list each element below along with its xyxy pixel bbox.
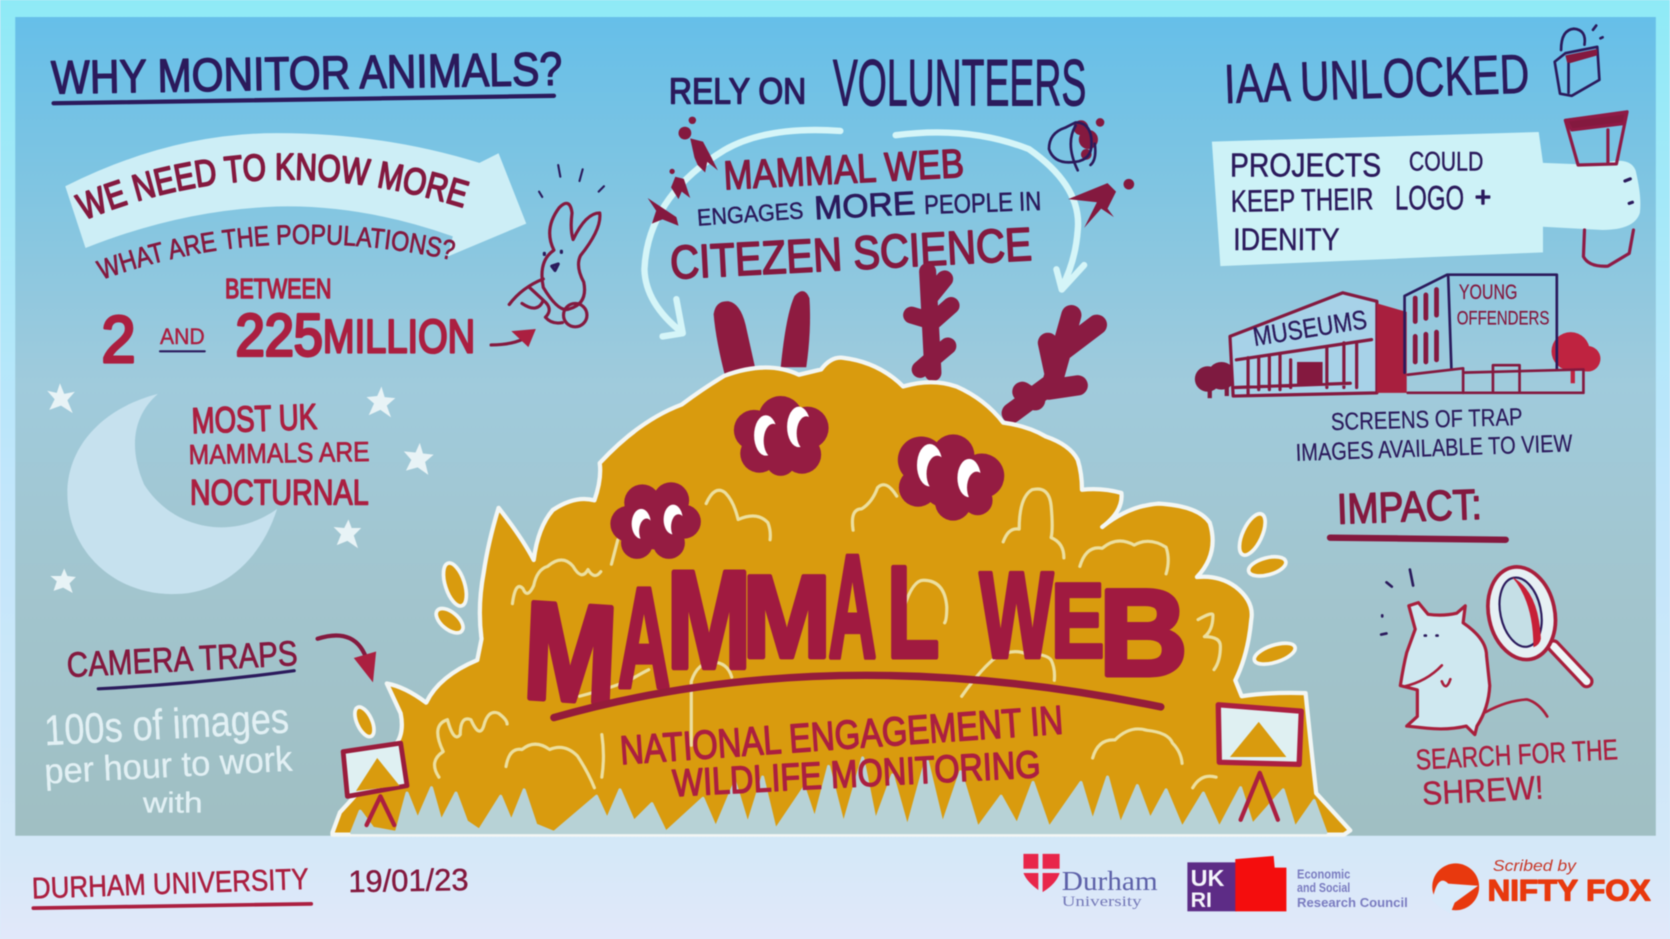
arrows: volunteer cycle — [644, 130, 1084, 336]
text: search for the shrew — [1415, 734, 1619, 812]
text: population range: AND — [160, 324, 205, 349]
title: mammal web: E — [1051, 561, 1104, 679]
squiggly plants — [435, 485, 1220, 788]
text: population range: 225 — [236, 302, 323, 369]
arrow banner: we need to know more: WE NEED TO KNOW MORE — [73, 152, 470, 220]
logo: durham university — [1023, 854, 1158, 910]
logo: UKRI: RI — [1191, 888, 1212, 912]
logo: nifty fox: Scribed by — [1493, 858, 1577, 875]
heading: camera traps: CAMERA TRAPS — [66, 634, 299, 685]
museum building — [1230, 293, 1407, 396]
text: projects could keep their logo and identity: LOGO — [1395, 180, 1464, 218]
icons: stars — [47, 383, 434, 593]
title: mammal web: L — [887, 541, 939, 685]
icon: shrew — [1381, 570, 1547, 735]
trees — [1195, 332, 1600, 398]
text: projects could keep their logo and identity: + — [1475, 182, 1491, 213]
logo: nifty fox: NIFTY FOX — [1488, 875, 1651, 908]
text: projects could keep their logo and identity: COULD — [1409, 146, 1483, 176]
young offenders label: OFFENDERS — [1457, 309, 1549, 330]
banner: projects, held by hand — [1212, 132, 1640, 266]
text: screens of trap images — [1295, 404, 1574, 467]
heading: impact: IMPACT: — [1336, 481, 1483, 534]
icon: camera trap left — [343, 743, 407, 825]
animal eyes: left — [610, 482, 701, 559]
text: mammal web engages more people in citizen science: MAMMAL WEB — [722, 140, 965, 198]
logo: durham university: University — [1062, 894, 1142, 910]
icon: crescent moon — [67, 394, 277, 594]
text: mammal web engages more people in citizen science: ENGAGES — [696, 197, 804, 231]
leaves around bush — [351, 510, 1298, 739]
icon: camera trap right — [1218, 705, 1301, 820]
logo text: economic and social research council: Economic — [1297, 866, 1350, 881]
text: population range: MILLION — [323, 310, 475, 362]
heading: why monitor animals: WHY MONITOR ANIMALS? — [51, 43, 563, 104]
young offenders building — [1405, 275, 1583, 393]
logo: nifty fox — [1432, 858, 1651, 913]
arrow to rabbit — [491, 329, 536, 347]
heading: IAA unlocked: IAA UNLOCKED — [1223, 43, 1530, 115]
logo: UKRI — [1187, 856, 1286, 912]
logo text: economic and social research council — [1297, 866, 1408, 910]
text: 100s of images: per hour to work — [43, 740, 294, 792]
text: projects could keep their logo and identity: PROJECTS — [1230, 147, 1381, 184]
text: projects could keep their logo and identity — [1230, 146, 1491, 257]
young offenders label: YOUNG — [1459, 280, 1517, 304]
logo: durham university: Durham — [1062, 865, 1158, 896]
text: population range — [101, 273, 475, 376]
logo text: economic and social research council: Research Council — [1297, 895, 1408, 910]
antlers behind bush — [912, 271, 1097, 413]
text: most UK mammals are nocturnal: MAMMALS ARE — [188, 436, 370, 470]
footer: date: 19/01/23 — [348, 862, 469, 899]
icon: open padlock — [1555, 26, 1603, 96]
text: population range: BETWEEN — [225, 273, 331, 304]
text: mammal web engages more people in citizen science: MORE — [813, 184, 916, 226]
title: mammal web: W — [980, 547, 1054, 683]
animal eyes: right — [898, 434, 1004, 521]
subtitle — [618, 697, 1065, 805]
arrow to camera — [318, 635, 376, 682]
ears behind bush — [714, 291, 810, 381]
heading: rely on volunteers: VOLUNTEERS — [833, 45, 1086, 119]
text: 100s of images — [43, 694, 294, 819]
heading: rely on volunteers: RELY ON — [669, 70, 806, 111]
young offenders label — [1457, 280, 1549, 330]
text: screens of trap images: SCREENS OF TRAP — [1331, 404, 1523, 436]
text: screens of trap images: IMAGES AVAILABLE TO VIEW — [1295, 430, 1574, 467]
text: mammal web engages more people in citizen science — [669, 140, 1042, 289]
icons: volunteers — [648, 117, 1134, 228]
text: mammal web engages more people in citizen science: CITEZEN SCIENCE — [669, 218, 1033, 289]
subtitle: NATIONAL ENGAGEMENT IN — [618, 697, 1065, 773]
logo: UKRI: UK — [1191, 865, 1224, 891]
text: search for the shrew: SHREW! — [1421, 769, 1544, 812]
text: projects could keep their logo and identity: IDENITY — [1233, 221, 1340, 257]
subtitle: WILDLIFE MONITORING — [671, 743, 1042, 805]
grass — [352, 758, 1326, 833]
text: search for the shrew: SEARCH FOR THE — [1415, 734, 1619, 777]
title: mammal web: M — [742, 551, 831, 682]
icon: magnifying glass — [1480, 561, 1587, 681]
text: population range: 2 — [101, 302, 136, 376]
text: mammal web engages more people in citizen science: PEOPLE IN — [924, 186, 1042, 220]
museums label: MUSEUMS — [1251, 304, 1369, 352]
illustration: bush — [332, 358, 1350, 835]
animal eyes: top — [734, 396, 829, 476]
title: mammal web: B — [1099, 564, 1187, 701]
text: projects could keep their logo and identity: KEEP THEIR — [1231, 181, 1374, 219]
text: most UK mammals are nocturnal — [188, 396, 370, 513]
icon: jar above hand — [1565, 112, 1633, 266]
logo text: economic and social research council: and Social — [1297, 880, 1350, 895]
illustration: buildings — [1195, 275, 1600, 398]
title: mammal web: M — [667, 542, 751, 697]
heading: rely on volunteers — [669, 45, 1086, 119]
title: mammal web — [521, 525, 1187, 733]
text: 100s of images: with — [142, 787, 203, 819]
icon: rabbit — [509, 165, 604, 327]
title: mammal web: A — [618, 558, 670, 717]
text: most UK mammals are nocturnal: MOST UK — [191, 396, 318, 441]
title: mammal web: A — [829, 525, 876, 688]
footer: durham university: DURHAM UNIVERSITY — [31, 863, 309, 906]
text: most UK mammals are nocturnal: NOCTURNAL — [190, 474, 369, 513]
arrow banner: we need to know more — [65, 132, 526, 257]
text: what are the populations: WHAT ARE THE POPULATIONS? — [94, 224, 456, 280]
title underline — [554, 675, 1161, 718]
title: mammal web: M — [521, 572, 620, 733]
text: 100s of images: 100s of images — [43, 694, 290, 755]
